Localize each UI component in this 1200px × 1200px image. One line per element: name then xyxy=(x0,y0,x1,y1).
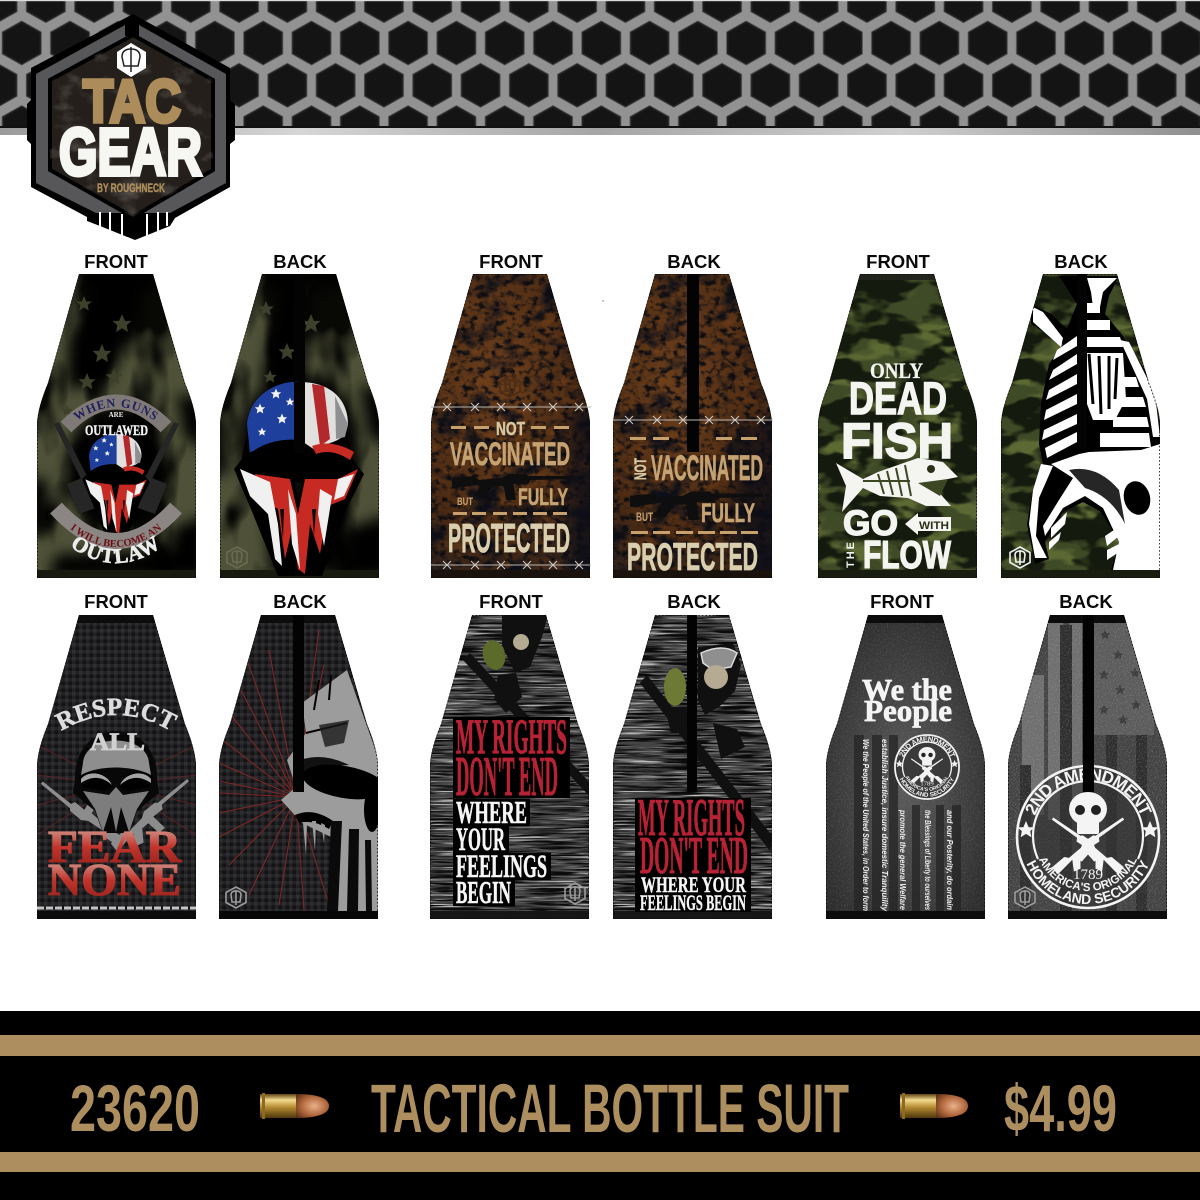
icon: rifle xyxy=(452,474,575,500)
back seam stripe xyxy=(687,615,697,792)
text: MY RIGHTS xyxy=(456,708,567,764)
text: Where Your: WHERE YOUR xyxy=(641,872,747,897)
bullet rows xyxy=(451,426,569,515)
icon: fish skeleton xyxy=(836,458,958,512)
barbed wire top xyxy=(431,403,591,411)
emblem: 2nd Amendment small seal: HOMELAND SECURITY xyxy=(900,776,954,797)
text: The, vertical: THE xyxy=(845,542,857,568)
bottle suit: camo front, Only Dead Fish Go With The Flow xyxy=(818,274,978,578)
label: BACK, design 1: BACK xyxy=(273,251,327,272)
text: Your: YOUR xyxy=(456,822,506,858)
logo tagline: by Roughneck: BY ROUGHNECK xyxy=(97,183,165,195)
label: FRONT, design 5: FRONT xyxy=(479,591,544,612)
text: Protected: PROTECTED xyxy=(627,536,758,579)
text: Not: NOT xyxy=(496,419,525,439)
emblem: 2nd Amendment large seal: HOMELAND SECURITY xyxy=(1026,860,1148,904)
back seam stripe xyxy=(1077,274,1087,276)
text: Go: GO xyxy=(843,504,898,543)
bullet rows xyxy=(630,437,758,534)
label: FRONT, design 2: FRONT xyxy=(479,251,544,272)
emblem: 2nd Amendment large seal: AMERICA'S ORIGINAL xyxy=(1038,858,1138,892)
stray speck xyxy=(602,300,604,302)
bottle suit: rust front, Not Vaccinated xyxy=(431,274,599,579)
big skull xyxy=(281,670,388,911)
emblem: 2nd Amendment small seal: AMERICA'S ORIGINAL xyxy=(905,776,949,792)
vertical preamble text stripes: promote the general Welfare xyxy=(898,809,907,910)
text: Flow: FLOW xyxy=(863,534,951,577)
label: BACK, design 4: BACK xyxy=(273,591,327,612)
bottle suit: camo back, large fish skeleton xyxy=(1001,274,1161,578)
back seam stripe xyxy=(294,320,305,380)
banner: When Guns: WHEN GUNS xyxy=(72,398,158,420)
skull with US flag xyxy=(82,434,150,535)
label: FRONT, design 6: FRONT xyxy=(870,591,935,612)
text: MY RIGHTS xyxy=(638,789,745,847)
price: $4.99 xyxy=(1004,1071,1117,1145)
text: Fully: FULLY xyxy=(518,484,568,511)
skull xyxy=(73,731,159,833)
arrow with text: With: WITH xyxy=(919,520,949,532)
label: FRONT, design 1: FRONT xyxy=(84,251,149,272)
text: Vaccinated: VACCINATED xyxy=(450,436,570,472)
emblem: 2nd Amendment large seal: 2ND AMENDMENT xyxy=(1026,768,1152,816)
barbed wire xyxy=(613,416,773,424)
text: Feelings Begin: FEELINGS BEGIN xyxy=(640,890,746,915)
fish skeleton xyxy=(1027,276,1161,578)
text: Fear: FEAR xyxy=(48,822,182,872)
bottle suit: carbon front, Respect All Fear None xyxy=(37,615,196,919)
back seam stripe xyxy=(687,274,699,452)
text: None: NONE xyxy=(48,855,181,905)
text: But: BUT xyxy=(457,496,473,508)
text: Outlaw xyxy=(72,535,157,564)
icon: white skull shield emblem xyxy=(117,43,146,77)
label: FRONT, design 4: FRONT xyxy=(84,591,149,612)
bottle suit: rust back, Not Vaccinated xyxy=(613,274,783,584)
back seam stripe xyxy=(1083,615,1094,792)
bottle suit: olive flag back, flag punisher skull xyxy=(220,274,379,578)
text: Outlawed: OUTLAWED xyxy=(85,423,148,439)
text: Dead: DEAD xyxy=(849,373,947,424)
bottle suit: gray front, We the People xyxy=(826,615,985,919)
logo: TAC GEAR by Roughneck hexagon badge xyxy=(27,14,235,240)
emblem: 2nd Amendment large seal: 1789 xyxy=(1073,867,1103,883)
vertical preamble text stripes: We the People of the United States, in Order to form xyxy=(861,739,870,911)
crossed rifles xyxy=(40,765,202,861)
gas mask and rifle xyxy=(463,615,590,797)
emblem: 2nd Amendment large seal xyxy=(1016,765,1160,910)
emblem: 2nd Amendment small seal: 1789 xyxy=(920,781,934,788)
gas mask and rifle xyxy=(640,643,773,851)
text: Where: WHERE xyxy=(456,794,527,830)
text: We the: We the xyxy=(862,672,952,707)
header: hexagonal metal mesh banner xyxy=(0,0,1200,135)
label: BACK, design 2: BACK xyxy=(667,251,721,272)
crossed rifles xyxy=(54,422,179,530)
banner: I Will Become An xyxy=(50,502,182,549)
footer band: black with gold stripes xyxy=(0,1011,1200,1200)
bottle suit: gray flag back, 2nd Amendment seal xyxy=(1008,615,1167,919)
icon: brand mark xyxy=(227,547,247,568)
bottle suit: rust back, Not Vaccinated: VACCINATED xyxy=(651,449,763,488)
icon: brand mark xyxy=(1015,887,1035,908)
text: Respect, curved: RESPECT xyxy=(54,698,178,731)
vertical preamble text stripes xyxy=(861,739,954,912)
text: Outlaw: OUTLAW xyxy=(72,535,157,564)
banner: I Will Become An: I WILL BECOME AN xyxy=(70,524,162,547)
logo word: TAC: TAC xyxy=(83,68,181,135)
back seam stripe xyxy=(293,615,304,792)
text: Only: ONLY xyxy=(870,358,923,383)
chain xyxy=(37,906,196,910)
label: BACK, design 3: BACK xyxy=(1054,251,1108,272)
text: Fish: FISH xyxy=(841,413,953,469)
text: DON'T END xyxy=(456,746,558,808)
emblem: 2nd Amendment small seal: 2ND AMENDMENT xyxy=(899,736,956,758)
label: FRONT, design 3: FRONT xyxy=(866,251,931,272)
emblem: 2nd Amendment small seal xyxy=(894,734,960,800)
label: BACK, design 5: BACK xyxy=(667,591,721,612)
vertical preamble text stripes: establish Justice, insure domestic Tranquility xyxy=(880,739,889,912)
bottle suit: wood grain back, My Rights Don't End xyxy=(613,615,773,919)
bottle suit: olive flag front, When Guns Are Outlawed xyxy=(37,274,196,578)
barbed wire bottom xyxy=(431,561,591,569)
vertical preamble text stripes: the Blessings of Liberty to ourselves xyxy=(923,810,932,910)
text block: My Rights Don't End Where Your Feelings Begin xyxy=(635,789,751,915)
arrow with text: With xyxy=(905,513,951,535)
text: Fully: FULLY xyxy=(701,498,755,528)
text: DON'T END xyxy=(640,827,748,885)
label: BACK, design 6: BACK xyxy=(1059,591,1113,612)
icon: brand mark xyxy=(1010,547,1030,568)
text: Are: ARE xyxy=(109,411,124,419)
icon: brand mark xyxy=(226,887,246,908)
text: People: People xyxy=(864,693,952,728)
red rays xyxy=(219,630,329,910)
text: Feelings: FEELINGS xyxy=(456,849,547,885)
icon: rifle xyxy=(630,491,763,520)
icon: brand mark xyxy=(500,376,520,397)
bottle suit: rust front, Not Vaccinated: PROTECTED xyxy=(448,515,570,561)
bottle suit: carbon back, red rays and big skull xyxy=(219,615,388,919)
vertical preamble text stripes: and our Posterity, do ordain xyxy=(945,810,954,910)
product title: TACTICAL BOTTLE SUIT xyxy=(371,1070,849,1147)
icon: bullet right xyxy=(900,1093,968,1119)
bottle suit: wood grain front, My Rights Don't End xyxy=(430,615,591,919)
text: Not, vertical: NOT xyxy=(631,458,650,480)
text: Begin: BEGIN xyxy=(456,874,511,910)
icon: brand mark xyxy=(565,883,585,904)
banner: When Guns xyxy=(60,394,172,432)
item number: 23620 xyxy=(70,1071,200,1145)
logo word: GEAR: GEAR xyxy=(59,115,202,190)
flag punisher skull xyxy=(234,382,364,576)
text: But: BUT xyxy=(636,510,653,524)
text: All: ALL xyxy=(90,729,145,756)
icon: bullet left xyxy=(260,1093,329,1119)
backing panels behind text xyxy=(453,717,570,906)
